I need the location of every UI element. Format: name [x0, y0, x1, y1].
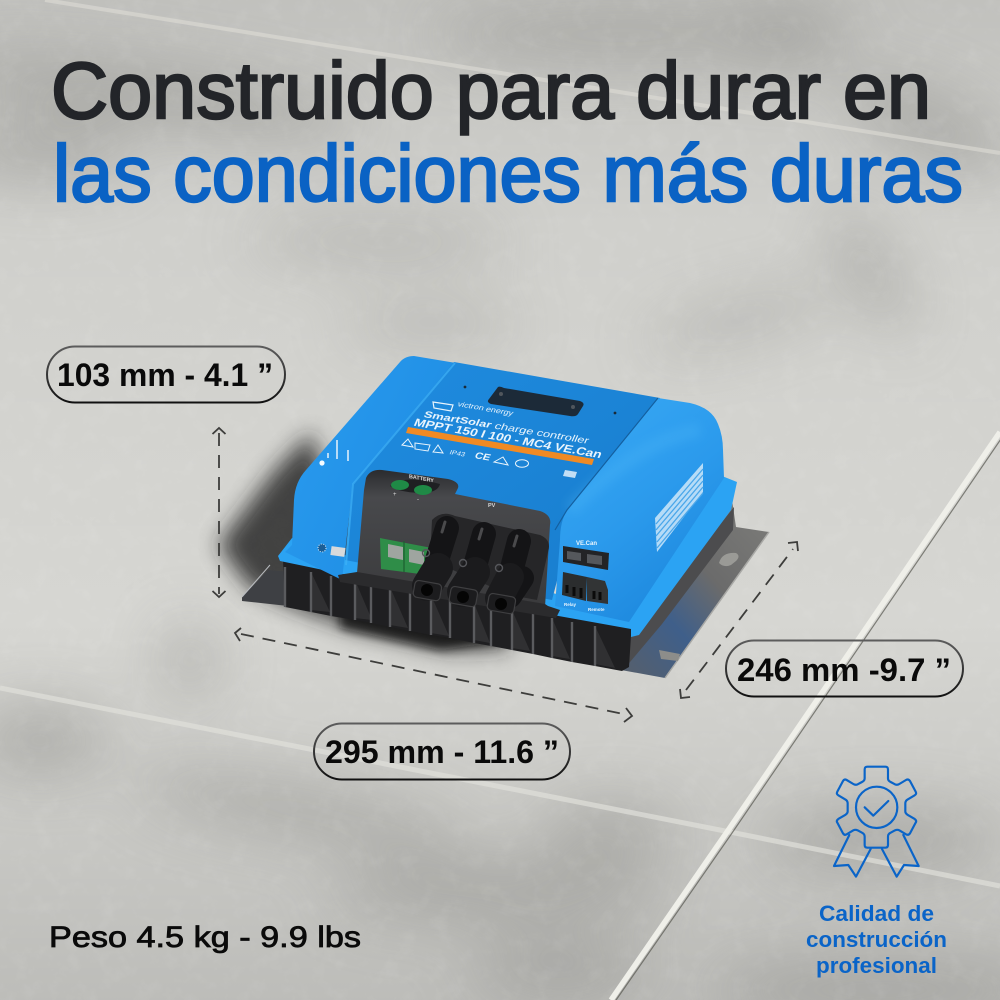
- quality text: [806, 901, 947, 978]
- label: height: 103 mm - 4.1 ”: [57, 357, 273, 393]
- orange stripe: [406, 427, 594, 465]
- label: depth: 246 mm -9.7 ”: [737, 652, 951, 688]
- quality text: profesional: [816, 953, 937, 978]
- connector panel: +: [393, 492, 397, 498]
- housing right lobe: [555, 398, 724, 622]
- brand text: [412, 400, 604, 463]
- connector panel: PV: [488, 503, 496, 509]
- housing flange: [278, 476, 737, 637]
- display cover: [488, 387, 584, 416]
- brand text: SmartSolar charge controller: [422, 410, 591, 446]
- MC4 connectors: [413, 514, 549, 614]
- USB port: [318, 544, 345, 557]
- label: depth: [726, 640, 963, 696]
- terminal blocks: [562, 572, 608, 612]
- label: length: [314, 724, 570, 780]
- height dimension arrow: [212, 428, 226, 597]
- mounting plate right: [610, 500, 769, 678]
- label: height: [47, 346, 285, 402]
- heatsink fins: [283, 560, 632, 671]
- quality text: construcción: [806, 927, 947, 952]
- title: [51, 46, 963, 218]
- brand text: MPPT 150 I 100 - MC4 VE.Can: [412, 416, 604, 461]
- title: Construido para durar en: [51, 46, 931, 135]
- length dimension arrow: [235, 628, 632, 722]
- terminal blocks: Relay: [564, 602, 577, 607]
- green terminal: [380, 538, 432, 575]
- heat warning label: [655, 463, 703, 552]
- brand text: victron energy: [456, 400, 515, 417]
- brand text: CE: [473, 451, 492, 463]
- status LEDs: [319, 440, 348, 466]
- depth dimension arrow: [680, 542, 798, 698]
- device shadow: [218, 432, 510, 650]
- product: solar charge controller: [242, 356, 769, 678]
- housing left lobe: [285, 356, 462, 580]
- terminal blocks: Remote: [588, 607, 605, 612]
- brand text: IP43: [448, 450, 466, 458]
- housing centre: [345, 362, 660, 600]
- regulatory icons: [402, 439, 528, 467]
- title: las condiciones más duras: [53, 129, 963, 218]
- label: length: 295 mm - 11.6 ”: [325, 734, 559, 770]
- VE.Can ports: VE.Can: [576, 541, 597, 547]
- quality text: Calidad de: [819, 901, 934, 926]
- connector panel: -: [417, 497, 419, 503]
- connector panel: [338, 470, 560, 618]
- connector panel: BATTERY: [409, 474, 434, 484]
- weight text: Peso 4.5 kg - 9.9 lbs: [49, 921, 361, 954]
- VE.Can ports: [563, 541, 609, 570]
- mounting plate left: [242, 570, 290, 606]
- brand logo: [433, 402, 453, 411]
- icon: quality badge: [834, 767, 919, 877]
